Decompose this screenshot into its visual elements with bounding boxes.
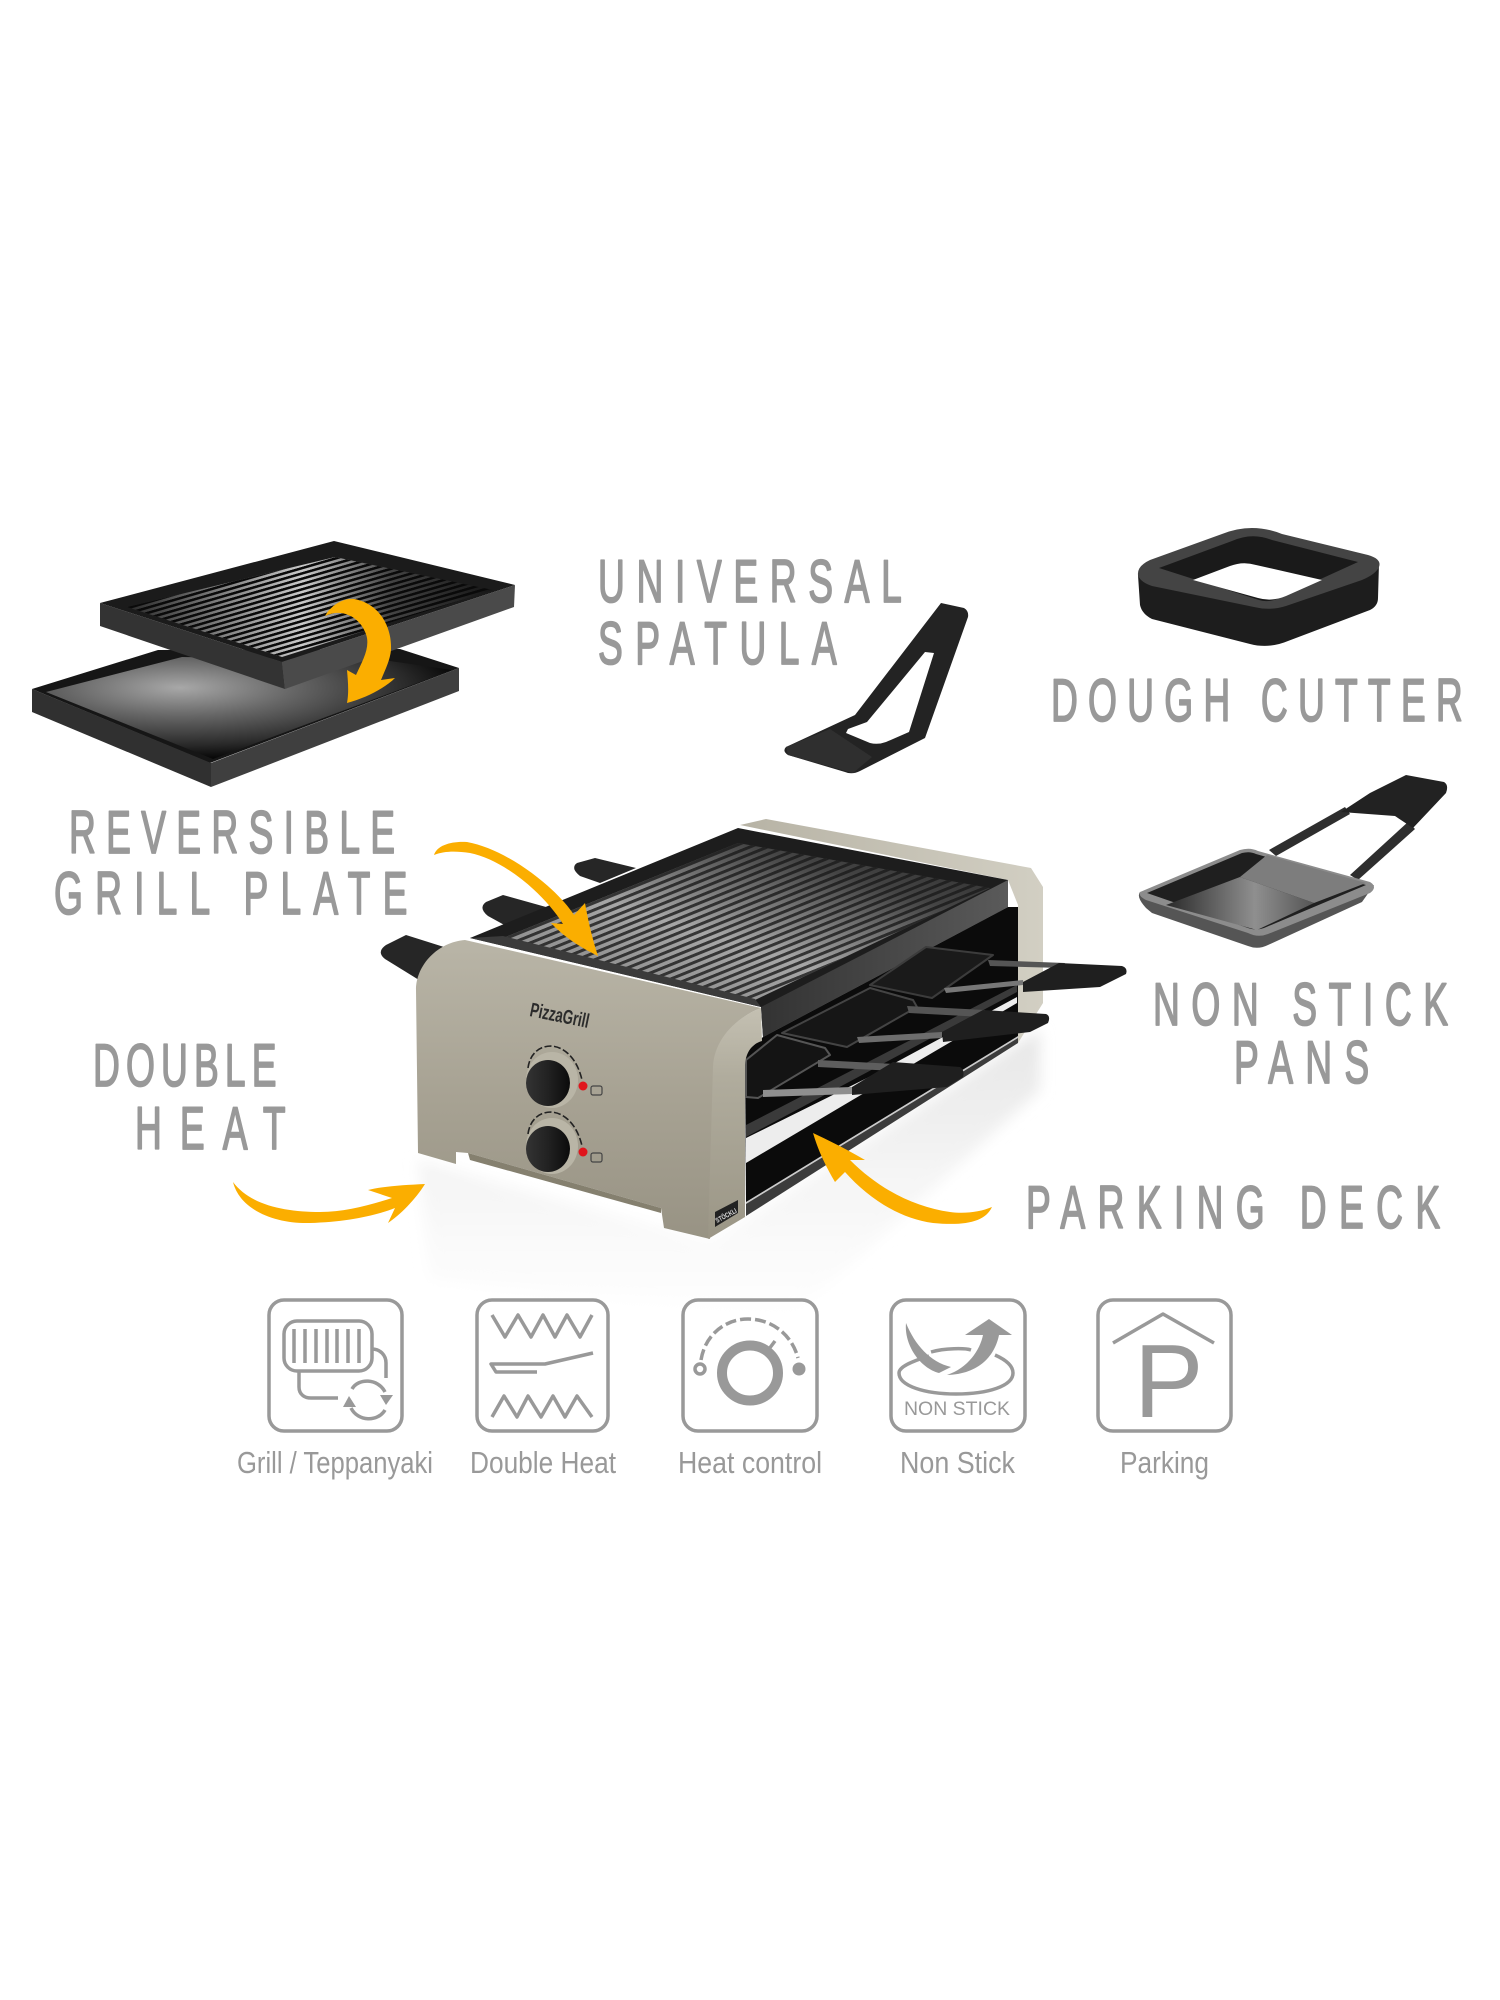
label: universal spatula (598, 548, 902, 677)
lower plate (32, 649, 459, 787)
label: reversible grill plate: GRILL PLATE (54, 860, 407, 927)
caption: Non Stick (900, 1445, 1015, 1480)
product: pizza grill (381, 819, 1127, 1239)
label: non stick pans (1153, 971, 1448, 1096)
label: parking deck: PARKING DECK (1026, 1174, 1440, 1241)
label: non stick pans: PANS (1234, 1029, 1369, 1096)
brand: PizzaGrill: PizzaGrill (528, 999, 591, 1033)
label: dough cutter: DOUGH CUTTER (1051, 667, 1463, 734)
raclette pans and handles (746, 947, 1126, 1098)
reversible plates illustration (32, 541, 515, 787)
label: non stick pans: NON STICK (1153, 971, 1448, 1038)
icon: spatula (784, 603, 968, 773)
label: reversible grill plate (54, 799, 407, 927)
caption: Double Heat (470, 1445, 616, 1480)
upper plate (100, 541, 515, 689)
feature: parking (1098, 1300, 1231, 1480)
rear beige housing (740, 819, 1043, 1043)
reflection under the grill (418, 1030, 1040, 1320)
front beige housing (416, 940, 762, 1239)
feature: parking: P (1134, 1324, 1203, 1440)
feature: double heat (470, 1300, 616, 1480)
rear left handles (381, 858, 636, 980)
upper heat dial (526, 1046, 602, 1108)
caption: Heat control (678, 1445, 822, 1480)
label: universal spatula: SPATULA (598, 610, 837, 677)
brand badge (714, 1200, 738, 1227)
label: double heat: HEAT (135, 1095, 286, 1162)
interior and parking deck (745, 907, 1018, 1216)
arrow: to double heat (233, 1182, 425, 1223)
feature: heat control (678, 1300, 822, 1480)
label: reversible grill plate: REVERSIBLE (69, 799, 395, 866)
icon: non stick pan (1139, 775, 1447, 948)
feature: non stick (891, 1300, 1025, 1480)
icon: dough cutter (1138, 528, 1380, 646)
label: universal spatula: UNIVERSAL (598, 548, 902, 615)
arrow: flip plate (325, 599, 395, 703)
caption: Parking (1120, 1445, 1209, 1480)
label: double heat: DOUBLE (93, 1032, 277, 1099)
lower heat dial (526, 1112, 602, 1174)
label: double heat (93, 1032, 286, 1162)
arrow: to grill plate (434, 842, 598, 956)
arrow: to parking deck (813, 1133, 992, 1224)
brand badge: STÖCKLI (714, 1206, 738, 1225)
feature: non stick: NON STICK (904, 1398, 1010, 1420)
feature: grill / teppanyaki (237, 1300, 433, 1480)
grill plate (470, 828, 1008, 1037)
caption: Grill / Teppanyaki (237, 1445, 433, 1480)
